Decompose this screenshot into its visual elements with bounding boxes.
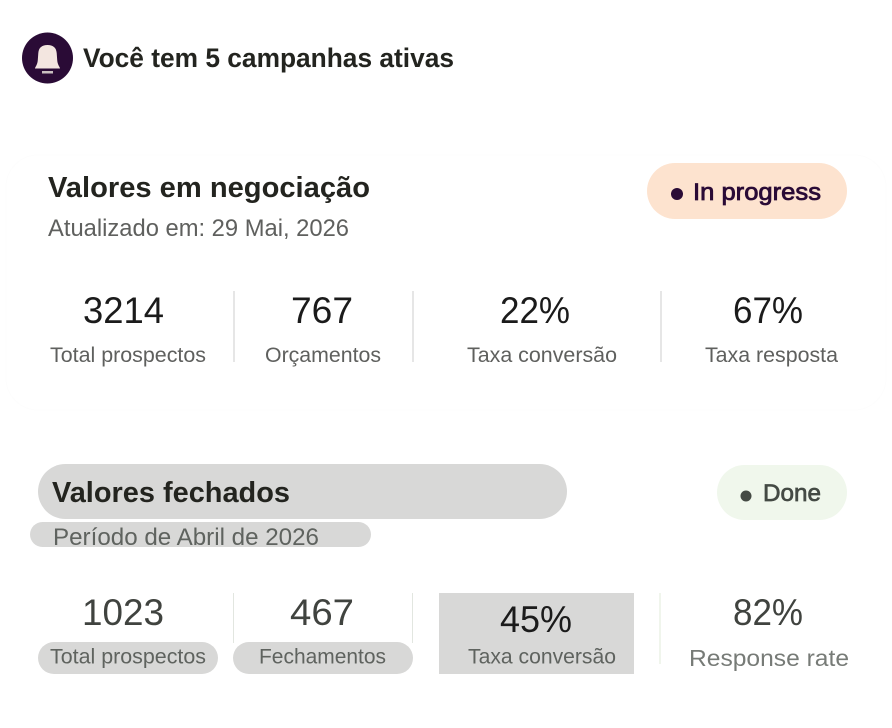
status badge: done	[717, 465, 847, 520]
stat: fechamentos	[233, 592, 413, 674]
stat: orçamentos: 767	[291, 290, 353, 331]
stat: taxa resposta: Taxa resposta	[705, 344, 838, 367]
stat: orçamentos: Orçamentos	[265, 344, 381, 367]
stat: taxa conversão: Taxa conversão	[468, 646, 616, 668]
status badge: in progress	[647, 163, 847, 219]
stat: taxa conversão: 45%	[500, 599, 572, 640]
stat: total prospectos: 1023	[82, 592, 164, 633]
stat: total prospectos: 3214	[83, 290, 164, 331]
stat: taxa conversão: Taxa conversão	[467, 344, 617, 367]
stat: response rate: 82%	[733, 592, 803, 633]
stat: fechamentos: 467	[290, 592, 354, 633]
stat: taxa resposta: 67%	[733, 290, 803, 331]
stat: fechamentos: Fechamentos	[259, 646, 386, 668]
status badge: in progress: In progress	[693, 179, 821, 206]
panel: valores em negociação	[6, 155, 886, 410]
period: Período de Abril de 2026	[53, 524, 319, 551]
notification header	[22, 32, 454, 84]
stat: response rate: Response rate	[689, 645, 849, 671]
notification text: Você tem 5 campanhas ativas	[83, 43, 454, 73]
stat: taxa conversão	[439, 593, 634, 674]
heading: Valores fechados	[52, 477, 290, 509]
updated date: Atualizado em: 29 Mai, 2026	[48, 215, 349, 242]
stat: taxa resposta	[705, 290, 838, 367]
stat: taxa conversão: 22%	[500, 290, 570, 331]
stat dividers	[233, 291, 662, 362]
stat: total prospectos: Total prospectos	[50, 646, 206, 668]
stat: taxa conversão	[467, 290, 617, 367]
heading: Valores em negociação	[48, 172, 370, 204]
panel outline	[6, 155, 886, 410]
status badge: done: Done	[763, 480, 821, 507]
stat: total prospectos: Total prospectos	[50, 344, 206, 367]
icon: bell	[22, 32, 73, 84]
stat: orçamentos	[265, 290, 381, 367]
panel: valores fechados	[30, 464, 849, 674]
stat: total prospectos	[38, 592, 218, 674]
stat: response rate	[689, 592, 849, 671]
stat: total prospectos	[50, 290, 206, 367]
stat dividers	[233, 593, 661, 664]
heading	[38, 464, 567, 519]
